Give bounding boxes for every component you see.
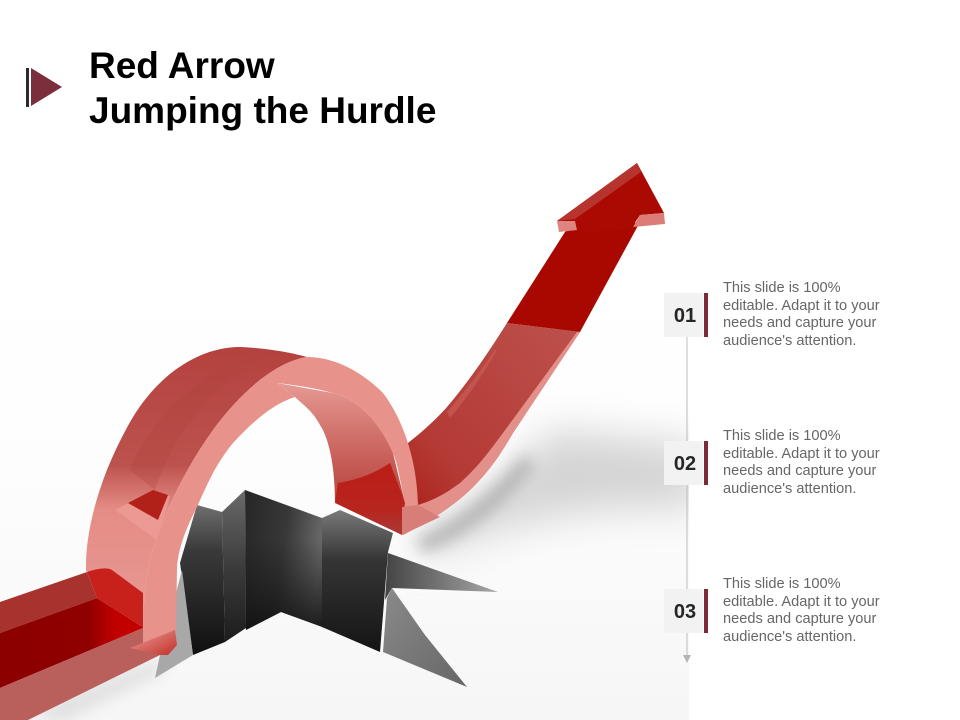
arrow head — [557, 163, 664, 232]
title — [89, 45, 436, 131]
step 02 number — [664, 441, 706, 485]
head left edge highlight — [557, 163, 641, 221]
step 01 text: audience's attention. — [723, 333, 856, 349]
incoming arrow shaft — [0, 572, 160, 720]
step 01 text — [723, 280, 880, 349]
landing tab base — [402, 505, 440, 535]
arch rear face — [86, 347, 307, 627]
step 03 text: needs and capture your — [723, 611, 876, 627]
step 02 text: This slide is 100% — [723, 428, 841, 444]
step 02 text: audience's attention. — [723, 481, 856, 497]
step 01 number — [664, 293, 706, 337]
floor background — [0, 280, 689, 720]
arrow shadow on the floor — [30, 430, 700, 720]
title: Jumping the Hurdle — [89, 90, 436, 131]
step 01 text: This slide is 100% — [723, 280, 841, 296]
shaft dark top face — [0, 598, 143, 688]
solid red section — [507, 222, 640, 332]
shaft light lower side — [0, 628, 160, 720]
shaft upper side — [0, 572, 97, 633]
step 03 text: This slide is 100% — [723, 576, 841, 592]
head barb left — [557, 221, 577, 232]
dark fold seen through the arch — [128, 490, 168, 520]
arch underside — [277, 383, 405, 503]
step 01 text: needs and capture your — [723, 315, 876, 331]
step 02 text — [723, 428, 880, 497]
step 01 number: 01 — [674, 305, 696, 327]
landing tab — [335, 463, 405, 535]
step 02 text: editable. Adapt it to your — [723, 446, 880, 462]
floor hole — [155, 490, 498, 687]
rising arrow shaft — [400, 163, 665, 535]
left crack — [155, 570, 193, 678]
step 02 text: needs and capture your — [723, 463, 876, 479]
lit lower section — [403, 323, 580, 535]
step 03 text — [723, 576, 880, 645]
translucent shaft end inside arch — [87, 568, 143, 627]
right crack upper spike — [385, 553, 498, 600]
step 03 number: 03 — [674, 601, 696, 623]
step 03 text: audience's attention. — [723, 629, 856, 645]
title icon: triangle with bar — [26, 68, 62, 107]
arrow fold seen through the arch — [115, 491, 170, 540]
inner band on rear face — [130, 358, 262, 490]
step 01 accent bar — [704, 293, 708, 337]
light edge strip — [400, 332, 580, 535]
hole panel left — [180, 505, 225, 655]
arch overlap details — [87, 358, 262, 627]
step 03 accent bar — [704, 589, 708, 633]
lower arch tip — [130, 630, 177, 655]
step 03 number — [664, 589, 706, 633]
head barb right — [633, 213, 665, 227]
hole panel center — [245, 490, 325, 630]
arch front light ring — [143, 357, 418, 655]
illustration: red arrow jumping over a crack in the floor — [0, 163, 689, 720]
step 01 text: editable. Adapt it to your — [723, 298, 880, 314]
highlight streak — [447, 350, 497, 418]
hole panel right — [322, 510, 393, 652]
title: Red Arrow — [89, 45, 275, 86]
step 02 number: 02 — [674, 453, 696, 475]
right crack lower spike — [383, 588, 467, 687]
step 03 text: editable. Adapt it to your — [723, 594, 880, 610]
step 02 accent bar — [704, 441, 708, 485]
hole panel fold — [222, 490, 246, 642]
